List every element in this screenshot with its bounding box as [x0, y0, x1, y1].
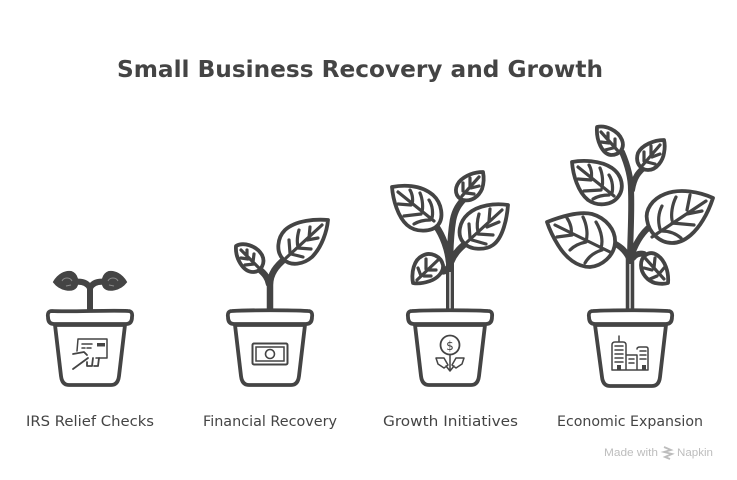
watermark: Made with Napkin [604, 447, 713, 459]
upper-left leaf [392, 186, 441, 231]
top-right small leaf [637, 140, 665, 170]
right leaf [278, 220, 328, 264]
left leaf [236, 244, 263, 272]
pot 2 [235, 325, 305, 385]
title: Small Business Recovery and Growth [117, 57, 603, 83]
icon: dollar plant [436, 336, 464, 371]
sprout stem [74, 282, 106, 310]
label: Financial Recovery: Financial Recovery [203, 414, 337, 430]
icon: city buildings [612, 336, 648, 370]
plant 3: Growth Initiatives [392, 172, 508, 385]
watermark: Made with Napkin: Napkin [677, 447, 713, 459]
plant 4: Economic Expansion [547, 127, 713, 386]
left middle leaf [572, 161, 622, 204]
stem [626, 258, 634, 310]
plant 2: Financial Recovery [228, 220, 328, 385]
stem [446, 262, 454, 310]
label: IRS Relief Checks: IRS Relief Checks [26, 414, 154, 430]
pot 1 [55, 325, 125, 385]
label: Growth Initiatives: Growth Initiatives [383, 414, 518, 430]
icon: Napkin logo [664, 447, 672, 459]
lower-left leaf [412, 254, 443, 283]
sprout left leaf [54, 272, 77, 290]
plant 1: IRS Relief Checks [48, 272, 132, 385]
right large leaf [647, 191, 713, 243]
icon: check and hand [73, 339, 107, 369]
watermark: Made with Napkin: Made with [604, 447, 658, 459]
icon: dollar plant: $ [446, 339, 454, 353]
pot 3 [415, 325, 485, 385]
label: Economic Expansion: Economic Expansion [557, 414, 703, 430]
icon: banknote [252, 344, 288, 364]
lower-right small leaf [641, 253, 668, 284]
left large leaf [547, 213, 615, 267]
sprout right leaf [103, 272, 126, 290]
top-left small leaf [597, 127, 623, 155]
stem [259, 258, 286, 310]
pot 4 [595, 325, 666, 386]
right leaf [460, 204, 508, 249]
top leaf [456, 172, 484, 200]
